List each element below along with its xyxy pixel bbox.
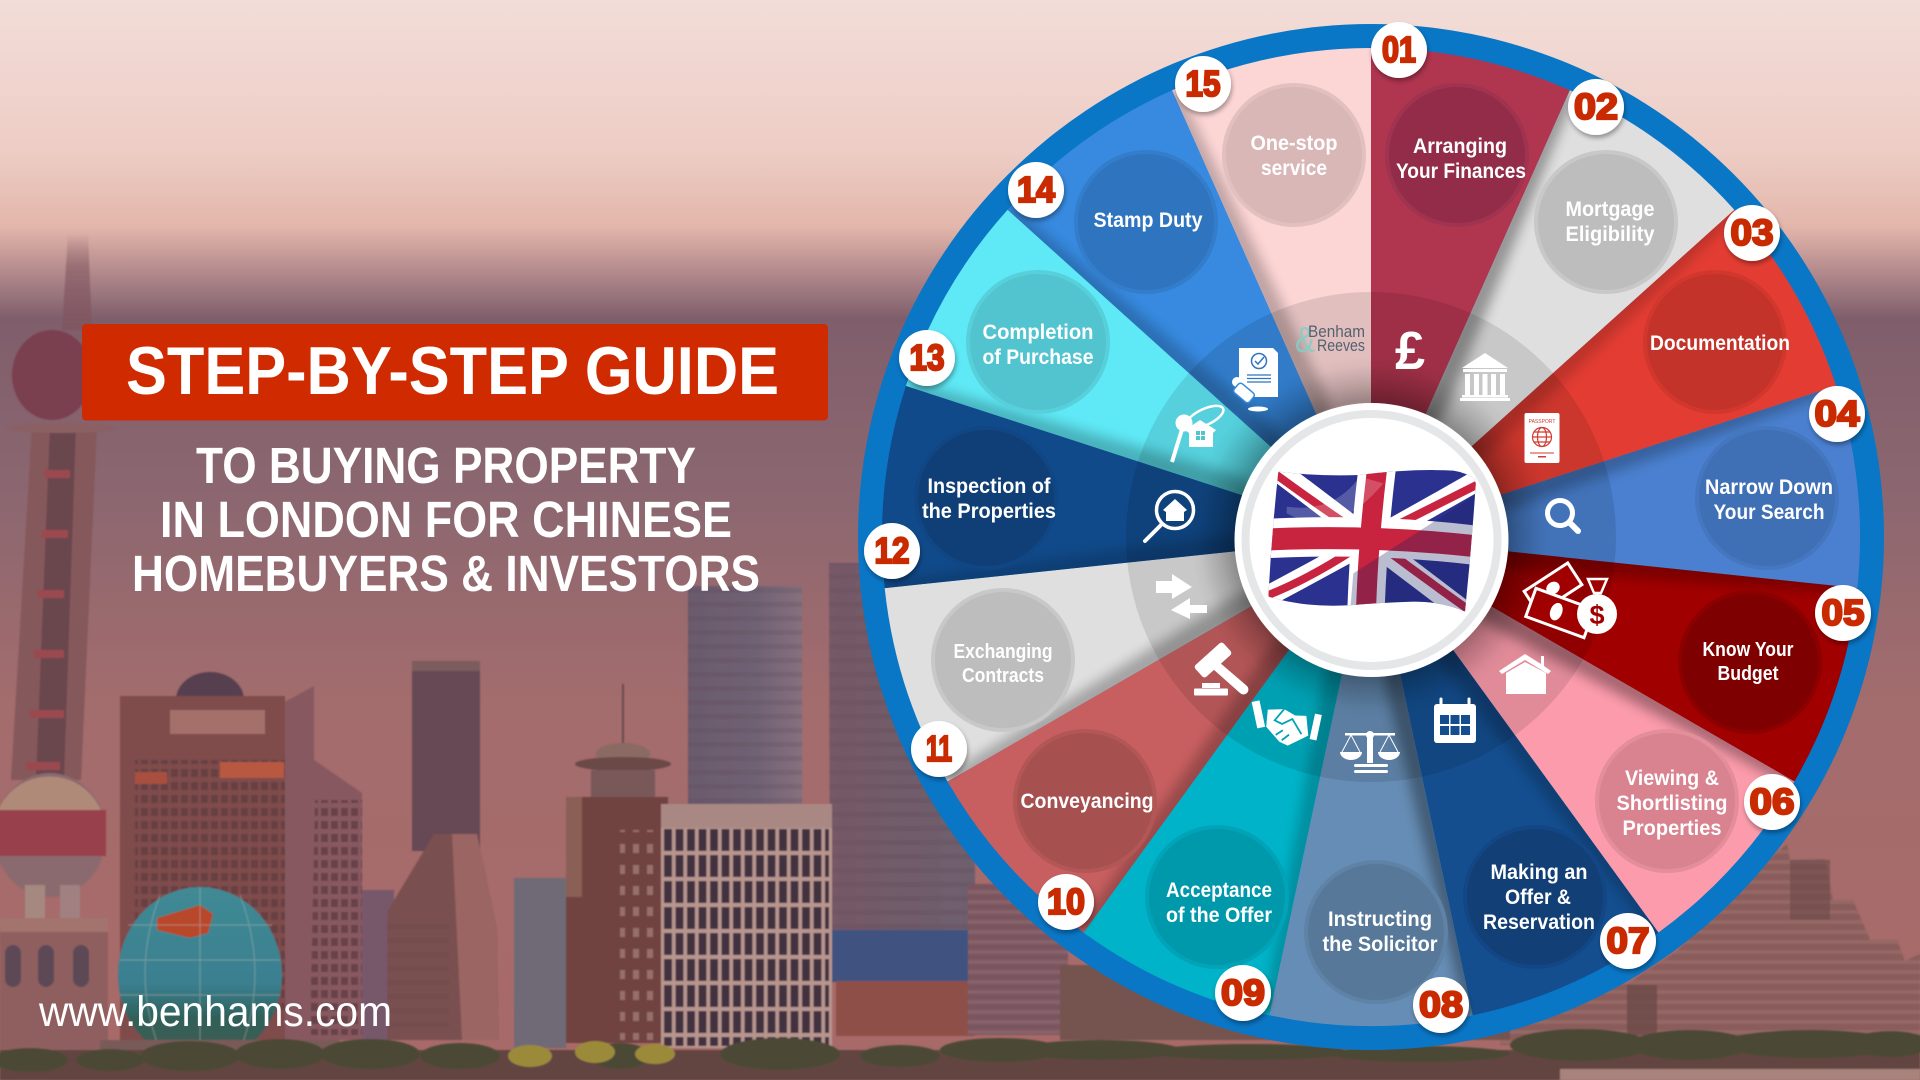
subtitle: HOMEBUYERS & INVESTORS	[132, 545, 760, 602]
number badge 09	[1215, 965, 1271, 1021]
wedge 11	[848, 365, 1376, 789]
number badge 12: 12	[874, 530, 910, 571]
step 06 label: Viewing &	[1625, 766, 1719, 790]
icon: bank	[1460, 353, 1510, 401]
step 12 label: the Properties	[922, 499, 1056, 523]
wedge 13	[903, 197, 1432, 546]
step 06 label	[1597, 731, 1737, 871]
number badge 05	[1815, 585, 1871, 641]
number badge 14	[1008, 162, 1064, 218]
icon: handshake	[1244, 699, 1322, 751]
step 13 label: Completion	[982, 320, 1094, 344]
subtitle	[132, 437, 760, 602]
step 02 label	[1536, 152, 1676, 292]
step 08 label: Instructing	[1328, 907, 1432, 931]
step 06 label: Shortlisting	[1616, 791, 1728, 815]
icon: document and stamp	[1232, 348, 1278, 412]
number badge 07	[1600, 913, 1656, 969]
number badge 11: 11	[926, 728, 952, 769]
step 05 label: Budget	[1718, 663, 1779, 685]
icon: money and bag	[1524, 563, 1617, 638]
number badge 04	[1809, 386, 1865, 442]
step 08 label	[1306, 862, 1446, 1002]
icon: pound sign: £	[1395, 321, 1425, 381]
number badge 08: 08	[1419, 984, 1463, 1025]
step 13 label: of Purchase	[982, 345, 1094, 369]
logo: Benham & Reeves: Reeves	[1317, 337, 1365, 355]
number badge 02	[1568, 79, 1624, 135]
wedge 05	[1350, 528, 1858, 786]
step 14 label	[1076, 152, 1216, 292]
number badge 04: 04	[1814, 393, 1860, 434]
step 07 label: Offer &	[1505, 885, 1571, 909]
logo: Benham & Reeves	[1295, 319, 1365, 360]
step 04 label: Narrow Down	[1705, 475, 1833, 499]
step 01 label	[1387, 85, 1527, 225]
number badge 13	[899, 330, 955, 386]
far right high-rises	[1500, 844, 1920, 1045]
step 04 label	[1697, 428, 1837, 568]
number badge 07: 07	[1606, 920, 1650, 961]
title banner: STEP-BY-STEP GUIDE	[126, 333, 779, 409]
step 10 label	[1015, 731, 1155, 871]
step 01 label: Your Finances	[1396, 159, 1526, 183]
icon: house	[1499, 654, 1551, 694]
step 07 label	[1465, 827, 1605, 967]
step 02 label: Mortgage	[1566, 197, 1655, 221]
wheel: darker inner band	[1126, 292, 1616, 782]
icon: magnifying glass	[1548, 500, 1578, 531]
step 01 label: Arranging	[1413, 134, 1507, 158]
step 05 label	[1680, 592, 1820, 732]
wedge 01	[1371, 48, 1570, 537]
pointed dark tower	[358, 661, 499, 1040]
tall glass towers	[688, 563, 1510, 1040]
step 11 label: Exchanging	[954, 641, 1052, 663]
icon: money and bag: $	[1589, 600, 1605, 630]
step 11 label	[933, 590, 1073, 730]
number badge 15	[1175, 56, 1231, 112]
number badge 08	[1413, 977, 1469, 1033]
wedge 14	[1002, 62, 1504, 544]
wedge 10	[923, 420, 1378, 938]
globe building	[100, 887, 340, 1063]
wedge 02	[1363, 87, 1752, 618]
centre medallion	[1234, 403, 1508, 677]
wedge 15	[1164, 9, 1553, 541]
icon: scales of justice	[1340, 731, 1400, 773]
number badge 12	[864, 523, 920, 579]
number badge 05: 05	[1822, 592, 1864, 633]
step 13 label	[968, 272, 1108, 412]
Oriental Pearl tower	[0, 234, 117, 1058]
number badge 09: 09	[1221, 972, 1265, 1013]
step 14 label: Stamp Duty	[1094, 208, 1203, 232]
domed and triangular buildings	[120, 672, 362, 1040]
step 10 label: Conveyancing	[1020, 789, 1154, 813]
number badge 06	[1744, 774, 1800, 830]
number badge 10	[1038, 874, 1094, 930]
step 09 label: Acceptance	[1166, 878, 1272, 902]
icon: passport	[1524, 413, 1560, 463]
number badge 10: 10	[1047, 881, 1085, 922]
icon: calendar	[1434, 699, 1476, 743]
round-top tower	[514, 684, 671, 1048]
step 05 label: Know Your	[1702, 639, 1794, 661]
step 09 label: of the Offer	[1166, 903, 1273, 927]
number badge 02: 02	[1574, 86, 1618, 127]
subtitle: IN LONDON FOR CHINESE	[160, 491, 732, 548]
wedge 03	[1365, 203, 1867, 685]
number badge 03: 03	[1730, 212, 1774, 253]
step 11 label: Contracts	[962, 665, 1044, 687]
number badge 03	[1724, 205, 1780, 261]
wedge 04	[1368, 377, 1898, 726]
icon: house keys	[1172, 401, 1227, 462]
step 07 label: Making an	[1490, 860, 1588, 884]
icon: magnifier with house	[1145, 492, 1194, 541]
step 12 label	[916, 428, 1056, 568]
riverside trees	[0, 1029, 1920, 1080]
icon: passport: PASSPORT	[1529, 419, 1555, 425]
website url: www.benhams.com	[38, 988, 392, 1036]
wedge 09	[1075, 496, 1380, 1017]
step 09 label	[1147, 827, 1287, 967]
step 02 label: Eligibility	[1566, 222, 1655, 246]
logo: Benham & Reeves: Benham	[1308, 323, 1365, 341]
step 15 label: One-stop	[1250, 131, 1338, 155]
logo: Benham & Reeves: &	[1295, 319, 1315, 360]
white office block	[661, 804, 832, 1048]
number badge 14: 14	[1017, 169, 1055, 210]
step 15 label	[1224, 85, 1364, 225]
step 12 label: Inspection of	[928, 474, 1051, 498]
number badge 06: 06	[1750, 781, 1794, 822]
number badge 11	[911, 721, 967, 777]
number badge 01: 01	[1382, 29, 1416, 70]
step 06 label: Properties	[1622, 816, 1722, 840]
step 15 label: service	[1261, 156, 1327, 180]
wedge 07	[1210, 532, 1666, 1050]
wheel: outer blue ring	[858, 24, 1884, 1050]
step 07 label: Reservation	[1483, 910, 1595, 934]
icon: waving Union Jack flag	[1263, 467, 1480, 617]
wedge 06	[1272, 529, 1799, 954]
icon: exchange arrows	[1156, 574, 1207, 619]
number badge 01	[1371, 22, 1427, 78]
number badge 15: 15	[1186, 63, 1220, 104]
step 03 label	[1645, 272, 1790, 412]
step 03 label: Documentation	[1650, 331, 1790, 355]
step 08 label: the Solicitor	[1322, 932, 1438, 956]
subtitle: TO BUYING PROPERTY	[196, 437, 696, 494]
number badge 13: 13	[910, 337, 944, 378]
wedge 08	[1176, 535, 1481, 1057]
icon: gavel	[1194, 641, 1248, 696]
wheel: wedges	[848, 9, 1898, 1057]
wedge 12	[864, 339, 1372, 597]
step 04 label: Your Search	[1714, 500, 1824, 524]
